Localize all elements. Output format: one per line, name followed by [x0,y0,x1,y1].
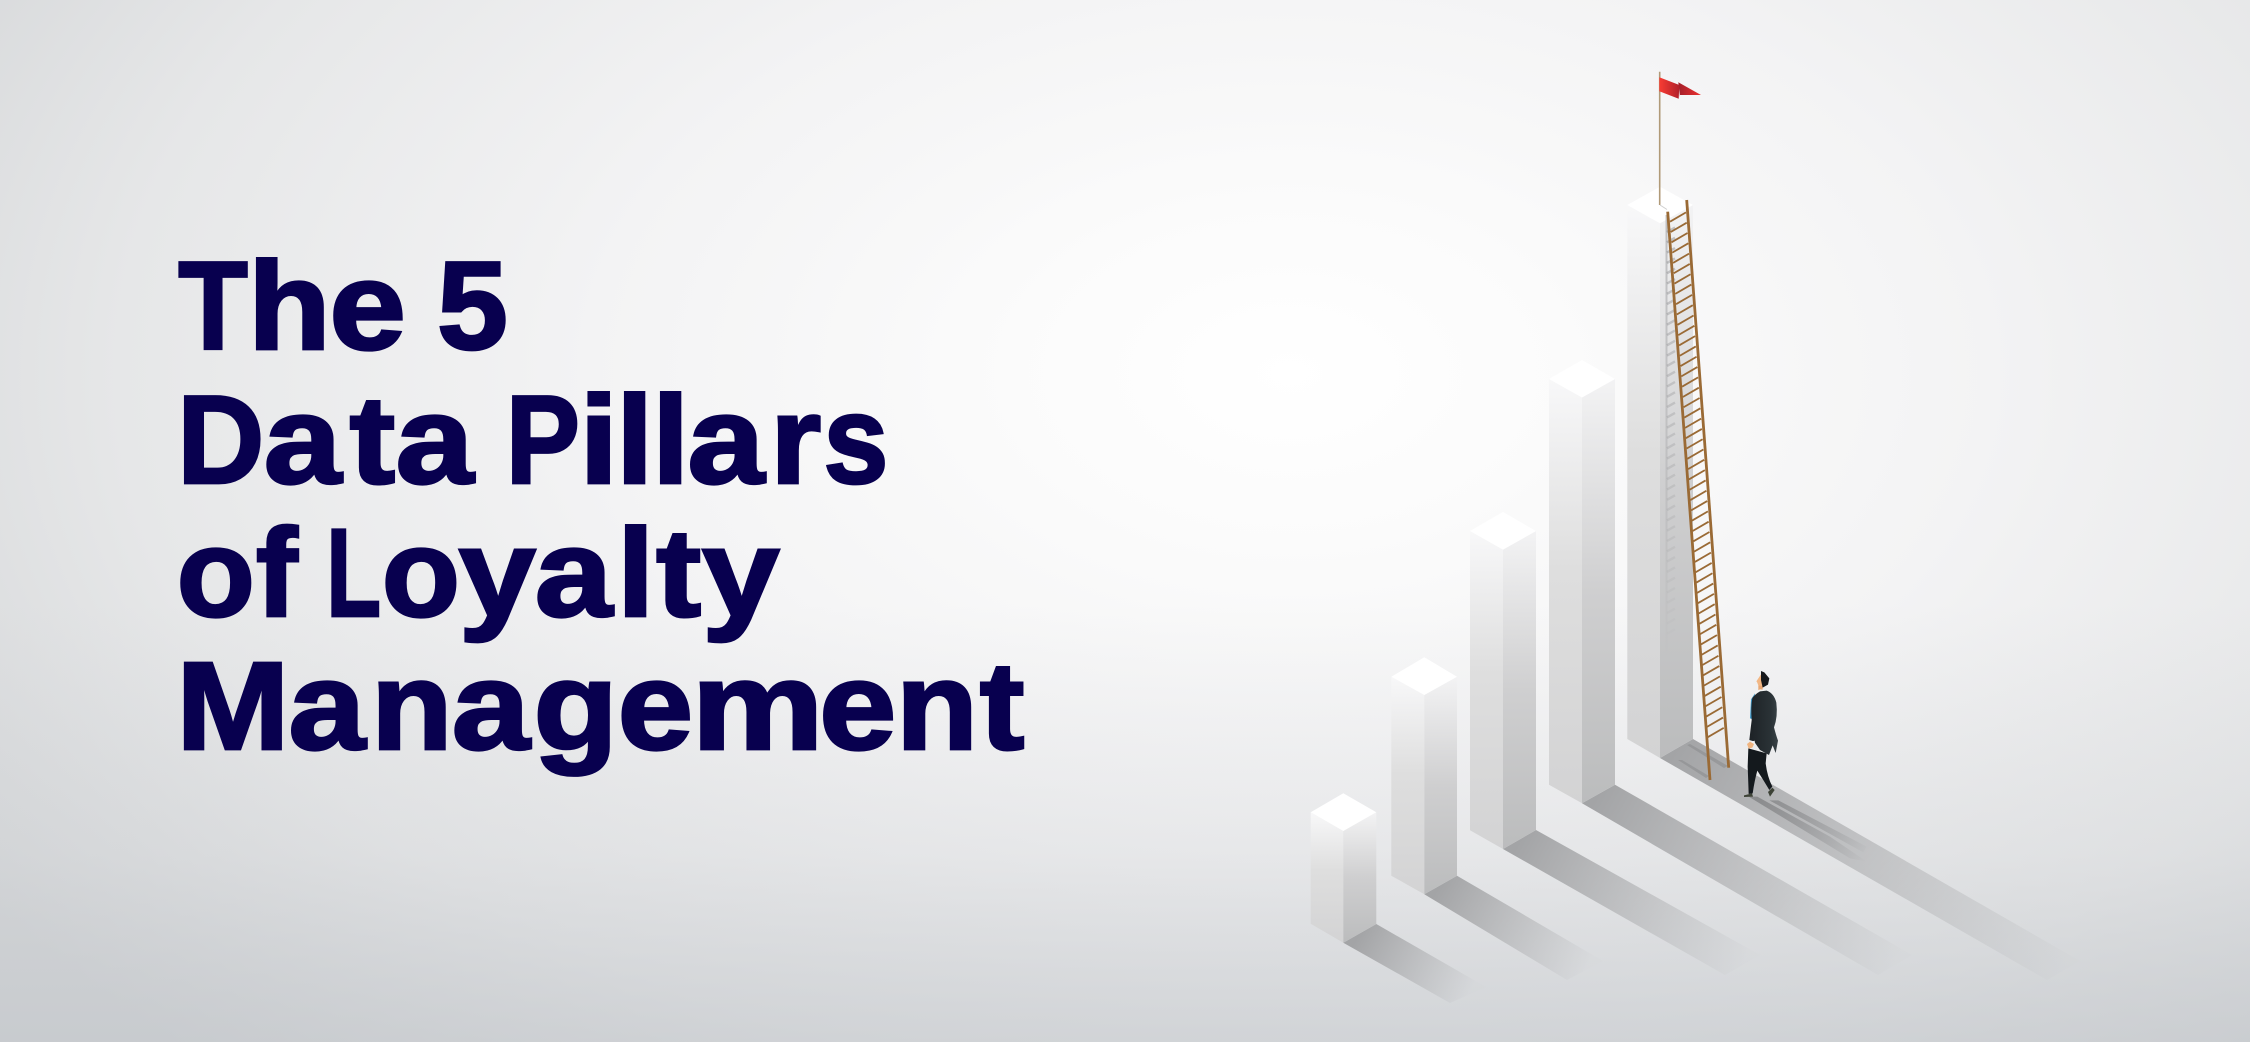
pillar 1 with shadow [1311,793,1486,1003]
title: a [535,504,614,643]
icon: flag on pole [1659,72,1701,210]
ladder ground shadow [1678,744,1728,778]
title: e [618,637,693,776]
title [176,237,1024,776]
title: o [177,504,255,643]
title: e [819,637,896,776]
title: t [980,637,1024,776]
title: s [824,371,888,510]
title: l [617,504,654,643]
title: m [692,637,824,776]
title: D [177,371,264,510]
title: h [248,237,331,376]
title: l [652,371,689,510]
title: t [656,504,701,643]
title: a [264,371,343,510]
title: f [256,504,298,643]
title: e [329,237,406,376]
pillar 3 with shadow [1470,512,1760,975]
title: n [371,637,452,776]
title: L [326,504,381,643]
title: a [452,637,531,776]
pillar 5 with shadow [1627,187,2080,980]
title: g [534,637,618,776]
title: l [616,371,653,510]
title: n [896,637,978,776]
title: M [176,637,290,776]
ladder shadow on pillar [1666,215,1675,660]
title: T [178,237,248,376]
icon: ladder [1668,200,1729,780]
title: y [459,504,536,643]
title: t [350,371,395,510]
pillar 4 with shadow [1549,360,1912,975]
title: a [396,371,475,510]
title: i [579,371,618,510]
title: 5 [437,237,508,376]
pillar 2 with shadow [1391,657,1603,980]
title: o [382,504,460,643]
title: a [688,371,766,510]
title: P [506,371,580,510]
title: y [702,504,780,643]
title: a [288,637,367,776]
businessman figure [1744,671,1867,862]
title: r [770,371,821,510]
